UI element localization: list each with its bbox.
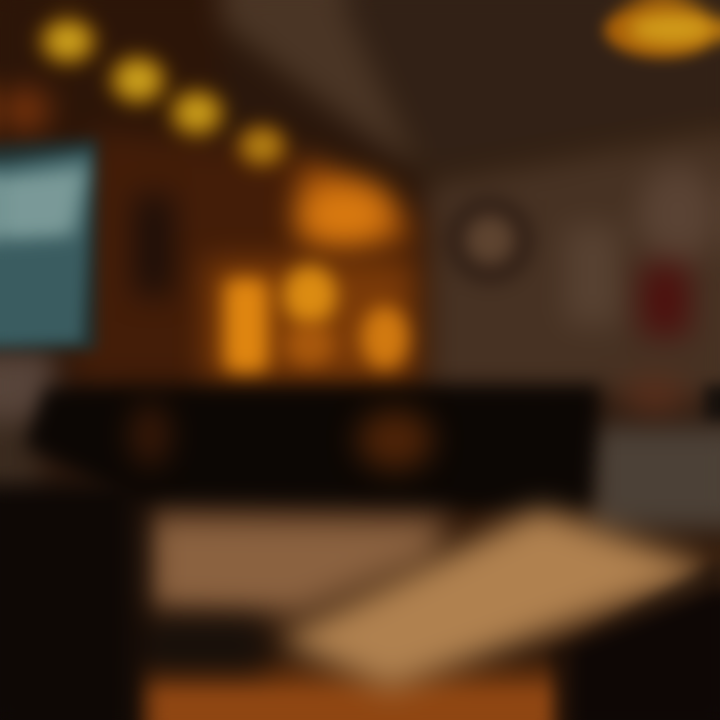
dark foreground right <box>550 560 720 720</box>
wall clock and decor <box>448 165 718 335</box>
ceiling lights <box>38 2 720 168</box>
orange glowing shelves <box>205 160 415 380</box>
object at right <box>620 377 720 420</box>
orange table edge <box>140 655 560 720</box>
window <box>0 138 98 350</box>
papers <box>140 508 718 690</box>
dark foreground left <box>0 478 160 720</box>
back counter <box>0 88 420 385</box>
dark counter band <box>25 385 600 510</box>
